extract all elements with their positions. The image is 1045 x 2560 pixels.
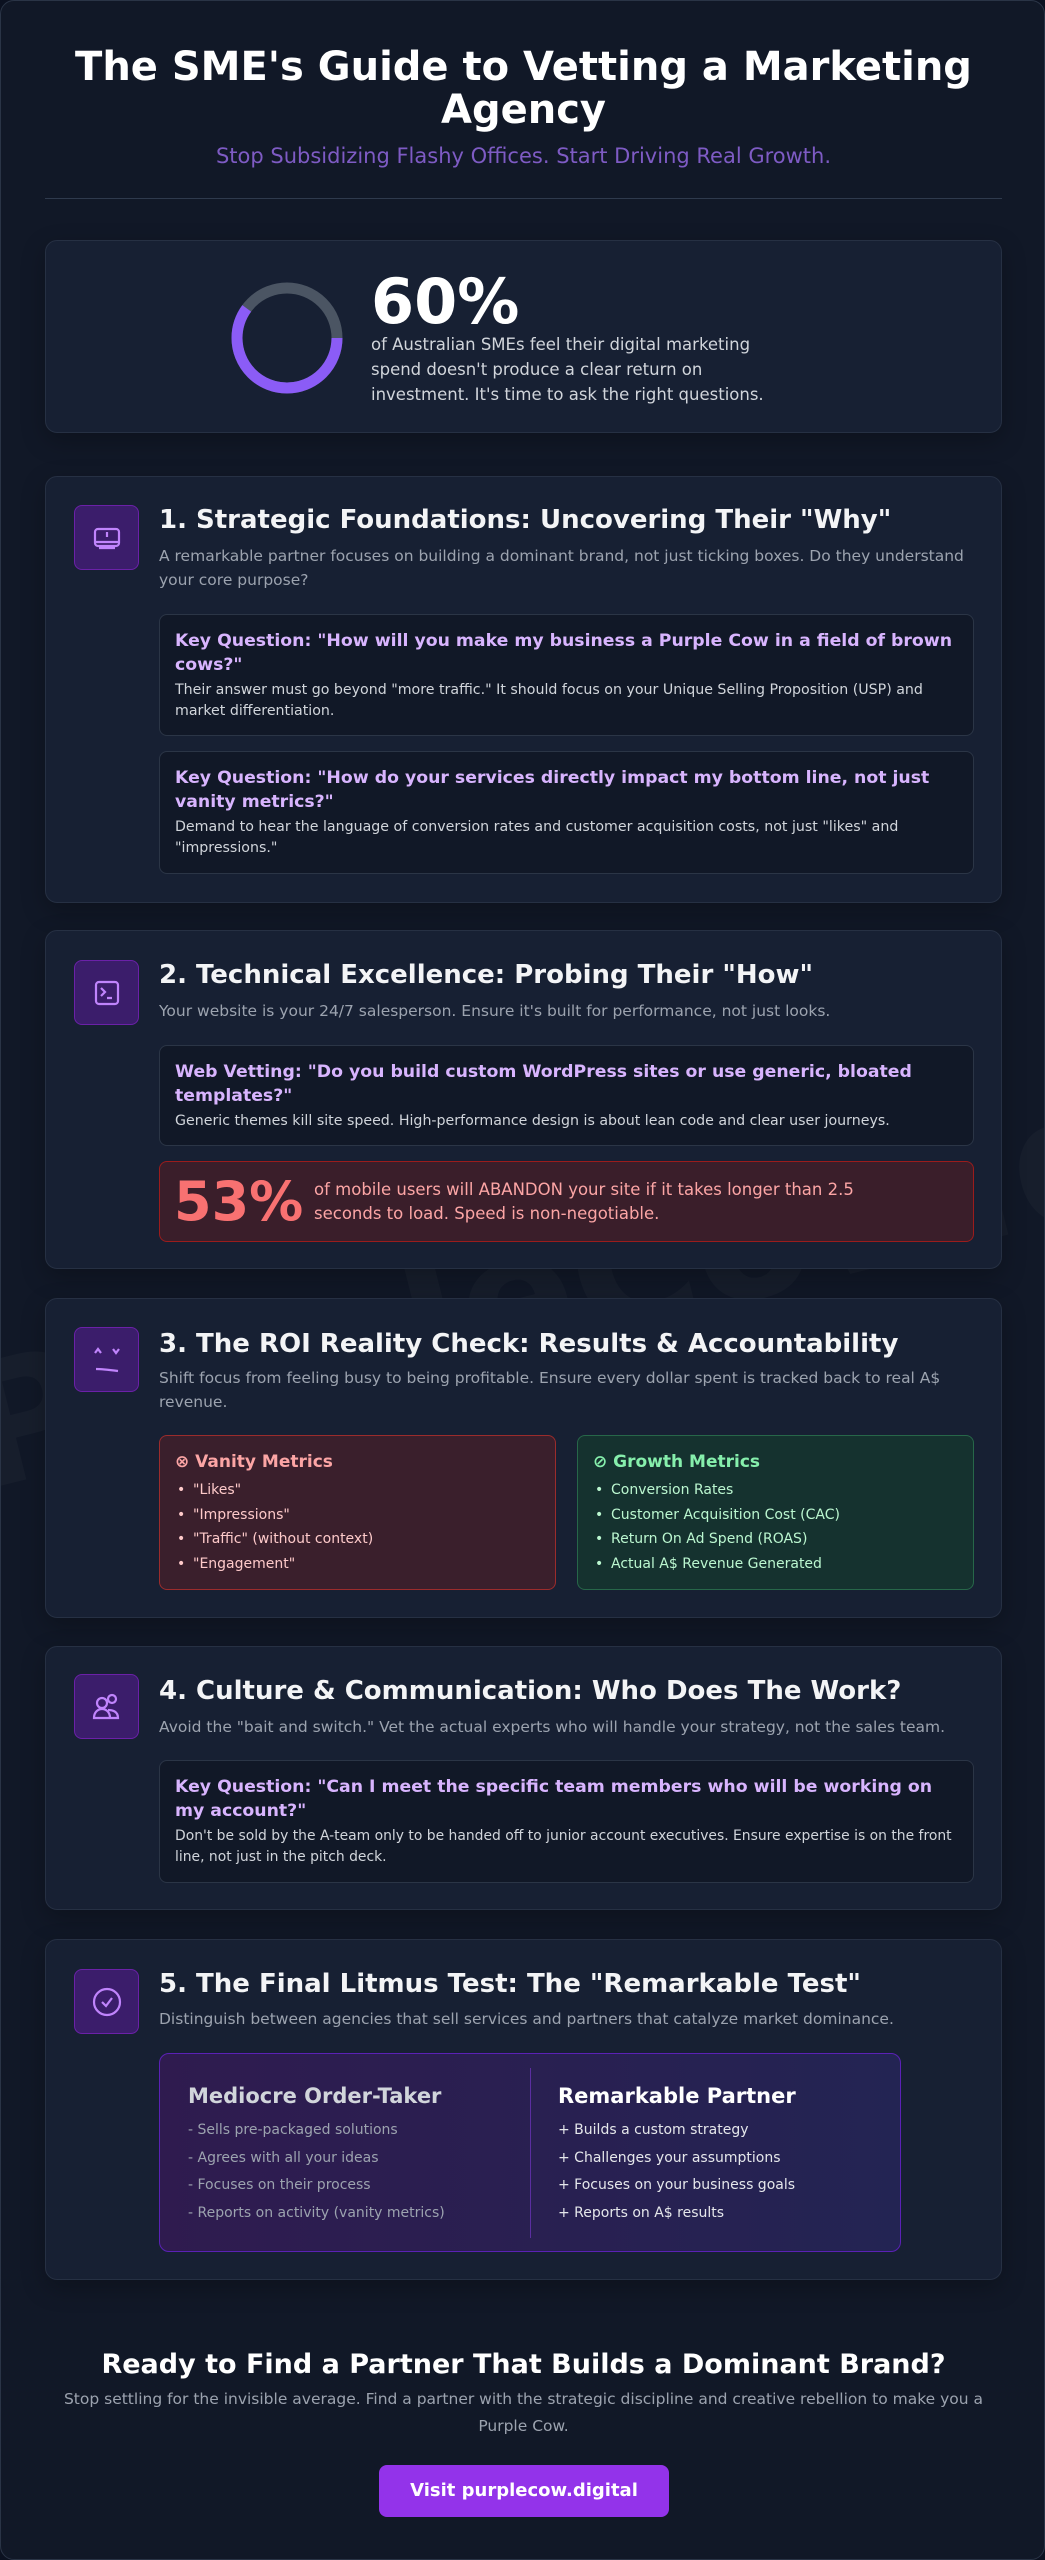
column: mediocre [188, 2084, 445, 2221]
CTA text: Stop settling for the invisible average. Find a partner with the strategic discipline and creative rebellion to make you a Purple Cow. [64, 2390, 983, 2435]
icon: check circle [74, 1969, 139, 2034]
title [75, 44, 972, 133]
heading: 4. Culture & Communication: Who Does The Work? [159, 1676, 901, 1706]
column: mediocre: - Reports on activity (vanity metrics) [188, 2205, 445, 2221]
CTA button: Visit purplecow.digital [410, 2480, 638, 2501]
column: mediocre: - Sells pre-packaged solutions [188, 2122, 398, 2138]
stat number: 60% [371, 265, 519, 338]
key question 1: Key Question: "How will you make my business a Purple Cow in a field of brown cows?" [175, 631, 952, 675]
growth metrics: ⊘ Growth Metrics [593, 1452, 760, 1472]
heading: 5. The Final Litmus Test: The "Remarkable Test" [159, 1969, 861, 1999]
panel: section 4 [45, 1646, 1002, 1910]
panel: section 3 [45, 1298, 1002, 1618]
callout: 53%: 53% [174, 1170, 303, 1233]
column: mediocre: - Agrees with all your ideas [188, 2150, 379, 2166]
column: remarkable: + Builds a custom strategy [558, 2122, 748, 2138]
key question 1 [159, 614, 974, 736]
web vetting box [159, 1045, 974, 1146]
icon: people [74, 1674, 139, 1739]
callout: 53% [159, 1161, 974, 1242]
callout: 53%: of mobile users will ABANDON your site if it takes longer than 2.5 seconds to load. Speed is non-negotiable. [314, 1180, 854, 1223]
column: remarkable: + Reports on A$ results [558, 2205, 724, 2221]
heading: 2. Technical Excellence: Probing Their "How" [159, 960, 813, 990]
description: Avoid the "bait and switch." Vet the actual experts who will handle your strategy, not the sales team. [159, 1718, 945, 1736]
title: The SME's Guide to Vetting a Marketing [75, 44, 972, 90]
column: remarkable: + Focuses on your business goals [558, 2177, 795, 2193]
panel: section 2 [45, 930, 1002, 1269]
vanity metrics: ⊗ Vanity Metrics [175, 1452, 333, 1472]
description: Shift focus from feeling busy to being profitable. Ensure every dollar spent is tracked back to real A$ revenue. [159, 1369, 940, 1411]
panel: stat 60% [45, 240, 1002, 433]
heading: 1. Strategic Foundations: Uncovering Their "Why" [159, 505, 891, 535]
vanity metrics: "Impressions" [193, 1506, 290, 1522]
vanity metrics: "Likes" [193, 1482, 241, 1498]
description: A remarkable partner focuses on building a dominant brand, not just ticking boxes. Do they understand your core purpose? [159, 547, 964, 589]
column: mediocre: Mediocre Order-Taker [188, 2084, 441, 2108]
growth metrics: Customer Acquisition Cost (CAC) [611, 1506, 840, 1522]
key question 1: Their answer must go beyond "more traffic." It should focus on your Unique Selling Proposition (USP) and market differentiation. [175, 682, 923, 719]
key question [159, 1760, 974, 1883]
key question 2: Demand to hear the language of conversion rates and customer acquisition costs, not just "likes" and "impressions." [175, 819, 898, 856]
key question: Don't be sold by the A-team only to be handed off to junior account executives. Ensure expertise is on the front line, not just in the pitch deck. [175, 1828, 952, 1865]
description: Distinguish between agencies that sell services and partners that catalyze market dominance. [159, 2010, 894, 2028]
CTA button [379, 2465, 669, 2517]
key question 2: Key Question: "How do your services directly impact my bottom line, not just vanity metrics?" [175, 768, 929, 812]
column: remarkable [558, 2084, 796, 2221]
column: remarkable: Remarkable Partner [558, 2084, 796, 2108]
growth metrics: Conversion Rates [611, 1482, 733, 1498]
description: Your website is your 24/7 salesperson. Ensure it's built for performance, not just looks. [159, 1002, 830, 1020]
title: Agency [441, 87, 606, 133]
growth metrics: Actual A$ Revenue Generated [611, 1556, 822, 1572]
vanity metrics [159, 1435, 556, 1590]
vanity metrics: "Traffic" (without context) [193, 1531, 373, 1547]
icon: terminal [74, 960, 139, 1025]
subtitle: Stop Subsidizing Flashy Offices. Start Driving Real Growth. [216, 144, 831, 168]
comparison box [159, 2053, 901, 2252]
column: remarkable: + Challenges your assumptions [558, 2150, 781, 2166]
panel: section 5 [45, 1939, 1002, 2280]
icon: wallet [74, 505, 139, 570]
heading: 3. The ROI Reality Check: Results & Accountability [159, 1329, 898, 1359]
key question: Key Question: "Can I meet the specific team members who will be working on my account?" [175, 1777, 932, 1821]
stat text: of Australian SMEs feel their digital marketing spend doesn't produce a clear return on investment. It's time to ask the right questions. [371, 335, 764, 404]
panel: section 1 [45, 476, 1002, 903]
column: mediocre: - Focuses on their process [188, 2177, 371, 2193]
key question 2 [159, 751, 974, 874]
growth metrics [577, 1435, 974, 1590]
icon: chart [74, 1327, 139, 1392]
web vetting box: Generic themes kill site speed. High-performance design is about lean code and clear user journeys. [175, 1113, 890, 1129]
growth metrics: Return On Ad Spend (ROAS) [611, 1531, 807, 1547]
donut chart [232, 282, 342, 394]
vanity metrics: "Engagement" [193, 1556, 295, 1572]
web vetting box: Web Vetting: "Do you build custom WordPress sites or use generic, bloated templates?" [175, 1062, 912, 1106]
CTA heading: Ready to Find a Partner That Builds a Dominant Brand? [101, 2349, 946, 2380]
